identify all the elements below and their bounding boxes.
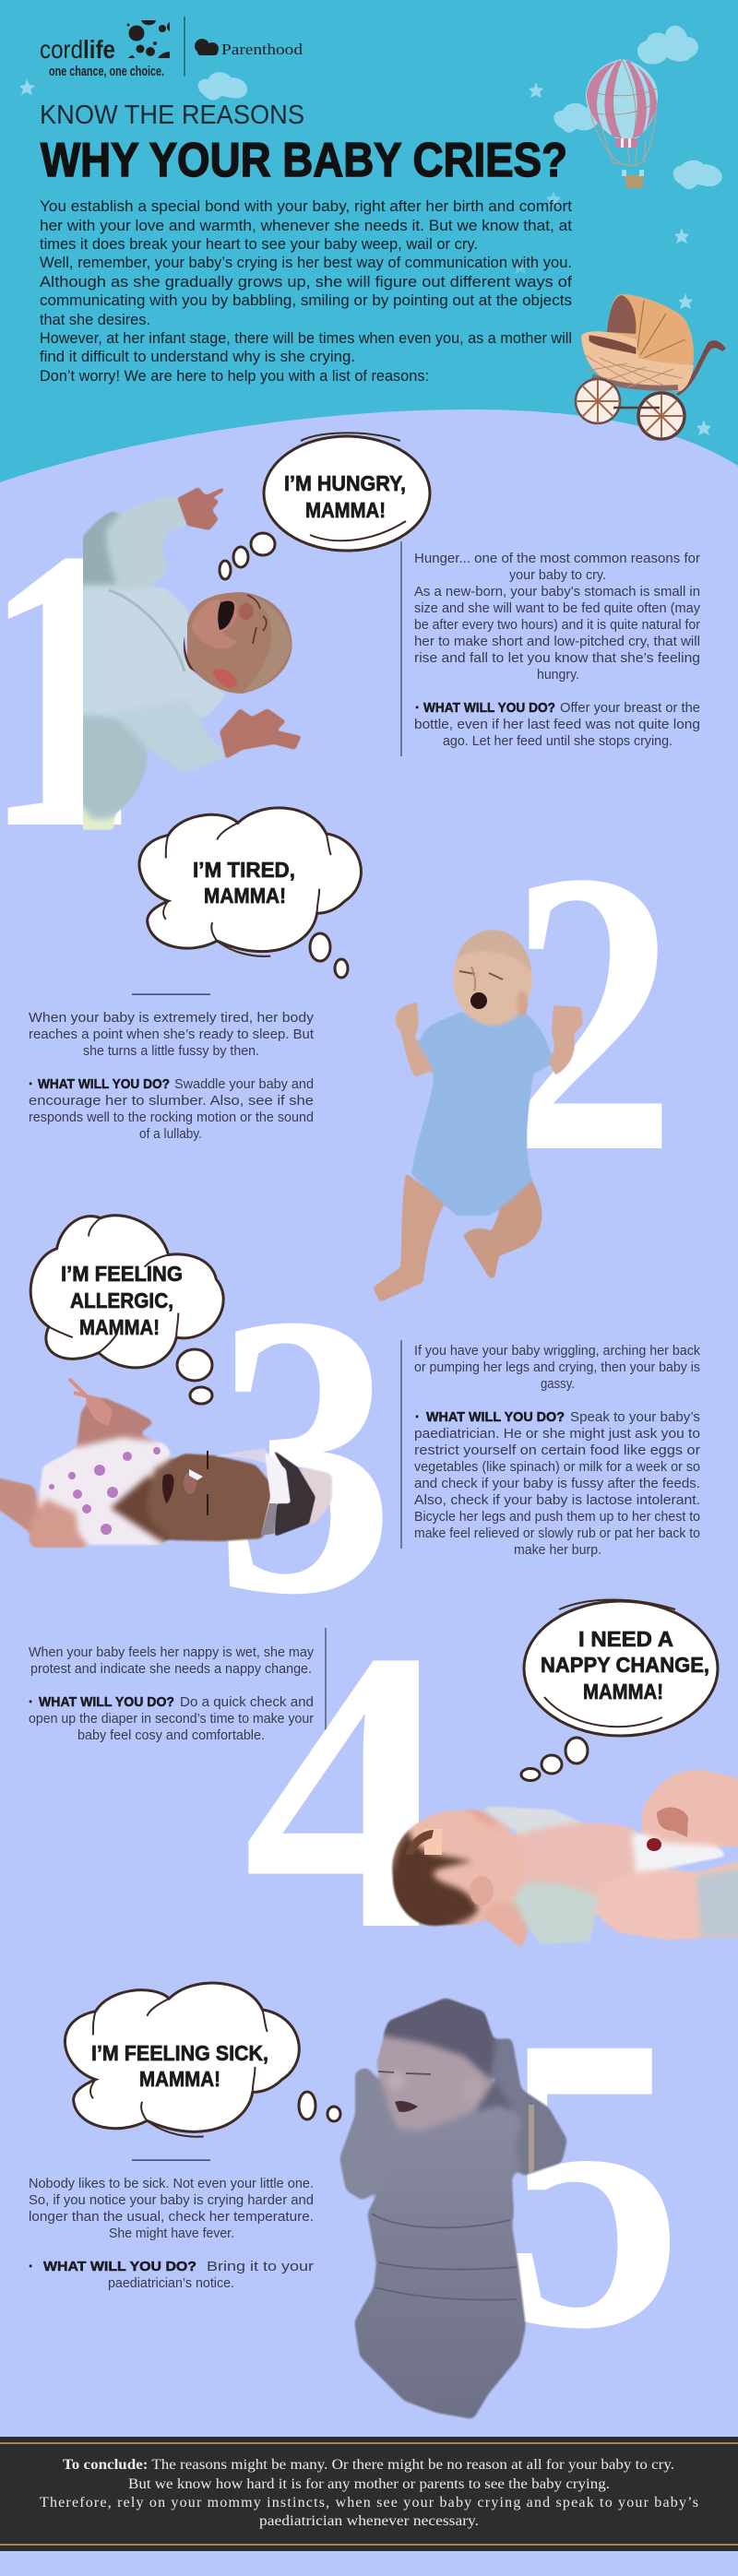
text block: reason 1: Hunger... one of the most common reasons for	[414, 552, 700, 566]
text block: reason 1: Offer your breast or the	[560, 701, 700, 716]
numeral 4: 4	[243, 1567, 455, 2013]
photo: baby 5 swaddled	[339, 1998, 567, 2419]
text block: reason 5: So, if you notice your baby is crying harder and	[29, 2193, 314, 2208]
photo: baby 3 crying with headband	[0, 1379, 332, 1548]
text block: reason 3: or pumping her legs and crying, then your baby is	[414, 1360, 700, 1375]
text block: reason 3: Also, check if your baby is lactose intolerant.	[414, 1493, 700, 1508]
text block: reason 1: rise and fall to let you know that she’s feeling	[414, 651, 700, 666]
conclusion text	[40, 2457, 698, 2529]
logo: cordlife: cordlife	[40, 35, 115, 64]
vertical divider 4	[325, 1628, 327, 1738]
bubble text: MAMMA!	[204, 884, 286, 908]
text block: reason 5: WHAT WILL YOU DO?	[43, 2259, 196, 2274]
text block: reason 5: paediatrician’s notice.	[108, 2276, 234, 2291]
text block: reason 2: reaches a point when she’s ready to sleep. But	[29, 1027, 314, 1042]
text block: reason 3: Speak to your baby’s	[570, 1410, 700, 1425]
text block: reason 4: WHAT WILL YOU DO?	[39, 1694, 174, 1710]
intro paragraph: communicating with you by babbling, smiling or by pointing out at the objects	[40, 291, 572, 309]
bubble text	[541, 1627, 709, 1703]
text block: reason 1: hungry.	[537, 668, 579, 683]
text block: reason 1: As a new-born, your baby’s stomach is small in	[414, 585, 700, 599]
text block: reason 2: When your baby is extremely tired, her body	[29, 1011, 315, 1026]
intro paragraph: You establish a special bond with your baby, right after her birth and comfort	[40, 197, 572, 215]
thought bubble: hungry	[220, 433, 430, 579]
bubble text: MAMMA!	[79, 1315, 160, 1339]
text block: reason 4: open up the diaper in second’s time to make your	[29, 1712, 314, 1727]
bubble text: I NEED A	[578, 1627, 673, 1651]
text block: reason 3: restrict yourself on certain food like eggs or	[414, 1443, 700, 1458]
thought bubble: allergic	[30, 1216, 223, 1404]
bubble text: MAMMA!	[583, 1680, 663, 1703]
bubble text	[193, 858, 295, 908]
text block: reason 2: responds well to the rocking motion or the sound	[29, 1110, 314, 1125]
icon: baby pram	[576, 294, 726, 439]
text block: reason 3: make her burp.	[514, 1543, 601, 1558]
text block: reason 1	[414, 552, 701, 749]
text block: reason 4: When your baby feels her nappy is wet, she may	[29, 1645, 315, 1660]
conclusion text: To conclude: The reasons might be many. Or there might be no reason at all for your baby to cry.	[63, 2457, 674, 2473]
text block: reason 3: WHAT WILL YOU DO?	[426, 1409, 565, 1425]
logo: Parenthood	[195, 39, 304, 58]
text block: reason 5: Bring it to your	[207, 2260, 314, 2274]
short rule	[132, 994, 210, 995]
text block: reason 3: paediatrician. He or she might just ask you to	[414, 1427, 700, 1442]
text block: reason 5	[29, 2177, 314, 2291]
logo divider	[184, 17, 185, 77]
intro paragraph: Although as she gradually grows up, she will figure out different ways of	[40, 273, 572, 291]
logo: cordlife	[40, 20, 170, 79]
thought bubble: feeling sick	[65, 1983, 340, 2137]
conclusion text: Therefore, rely on your mommy instincts, when see your baby crying and speak to your baby’s	[40, 2495, 698, 2511]
text block: reason 2: she turns a little fussy by then.	[83, 1044, 259, 1059]
text block: reason 3: make feel relieved or slowly rub or pat her back to	[414, 1526, 700, 1541]
text block: reason 3: If you have your baby wriggling, arching her back	[414, 1344, 701, 1359]
text block: reason 4	[29, 1645, 315, 1743]
conclusion text: But we know how hard it is for any mother or parents to see the baby crying.	[128, 2476, 610, 2492]
text block: reason 3: gassy.	[541, 1377, 575, 1392]
text block: reason 3	[414, 1344, 701, 1558]
text block: reason 3: vegetables (like spinach) or milk for a week or so	[414, 1460, 700, 1475]
photo: baby 1 crying on back	[76, 487, 302, 830]
bubble text: I’M FEELING SICK,	[91, 2041, 268, 2065]
header background	[0, 0, 738, 516]
text block: reason 4: baby feel cosy and comfortable.	[77, 1728, 265, 1743]
icon: hot air balloon	[586, 59, 658, 188]
bubble text: I’M TIRED,	[193, 858, 295, 882]
text block: reason 2	[29, 1011, 315, 1142]
bubble text: NAPPY CHANGE,	[541, 1653, 709, 1677]
text block: reason 2: Swaddle your baby and	[174, 1077, 314, 1092]
text block: reason 1: bottle, even if her last feed was not quite long	[414, 718, 700, 732]
intro paragraph: Don’t worry! We are here to help you with a list of reasons:	[40, 367, 429, 385]
text block: reason 2: WHAT WILL YOU DO?	[38, 1076, 170, 1092]
text block: reason 1: be after every two hours) and it is quite natural for	[414, 618, 700, 633]
logo: Parenthood: Parenthood	[221, 41, 304, 58]
heading: know the reasons: KNOW THE REASONS	[40, 101, 304, 130]
intro paragraph: her with your love and warmth, whenever she needs it. But we know that, at	[40, 217, 572, 234]
bubble text: I’M FEELING	[61, 1262, 183, 1286]
intro paragraph: However, at her infant stage, there will be times when even you, as a mother will	[40, 329, 572, 347]
numeral 3: 3	[214, 1230, 395, 1678]
bubble text	[61, 1262, 183, 1339]
thought bubble: tired	[139, 808, 361, 978]
text block: reason 1: ago. Let her feed until she stops crying.	[443, 734, 673, 749]
intro paragraph: Well, remember, your baby’s crying is her best way of communication with you.	[40, 254, 572, 271]
bubble text: MAMMA!	[305, 498, 386, 522]
text block: reason 1: ·	[415, 700, 420, 716]
bubble text	[91, 2041, 268, 2091]
photo: baby 4 nappy change	[392, 1770, 738, 1949]
thought bubble: nappy change	[521, 1599, 718, 1780]
text block: reason 2: of a lullaby.	[139, 1127, 202, 1142]
text block: reason 3: Bicycle her legs and push them up to her chest to	[414, 1510, 700, 1525]
bubble text: MAMMA!	[139, 2067, 220, 2091]
intro paragraph: find it difficult to understand why is she crying.	[40, 348, 355, 365]
text block: reason 4: protest and indicate she needs a nappy change.	[30, 1662, 312, 1677]
text block: reason 5: Nobody likes to be sick. Not even your little one.	[29, 2177, 314, 2191]
text block: reason 5: She might have fever.	[109, 2226, 234, 2241]
intro paragraph	[40, 197, 572, 385]
text block: reason 1: her to make short and low-pitched cry, that will	[414, 635, 700, 649]
numeral 2: 2	[507, 789, 676, 1237]
text block: reason 1: WHAT WILL YOU DO?	[423, 700, 555, 716]
vertical divider 3	[400, 1340, 402, 1549]
text block: reason 2: ·	[29, 1076, 33, 1092]
bubble text: ALLERGIC,	[70, 1288, 173, 1312]
decorative clouds and stars	[19, 26, 722, 435]
text block: reason 4: ·	[29, 1694, 33, 1710]
numeral 5: 5	[501, 1949, 683, 2416]
short rule 5	[132, 2160, 210, 2161]
text block: reason 1: your baby to cry.	[509, 568, 606, 583]
text block: reason 2: encourage her to slumber. Also, see if she	[29, 1094, 314, 1109]
text block: reason 1: size and she will want to be fed quite often (may	[414, 601, 701, 616]
photo: baby 2 yawning standing	[373, 930, 583, 1302]
conclusion banner	[0, 2437, 738, 2551]
intro paragraph: that she desires.	[40, 311, 150, 328]
text block: reason 5: ·	[29, 2259, 33, 2274]
text block: reason 4: Do a quick check and	[180, 1695, 314, 1710]
conclusion text: paediatrician whenever necessary.	[259, 2513, 479, 2529]
bubble text	[284, 471, 406, 522]
bubble text: I’M HUNGRY,	[284, 471, 406, 495]
text block: reason 3: and check if your baby is fussy after the feeds.	[414, 1477, 700, 1491]
heading: why your baby cries: WHY YOUR BABY CRIES?	[41, 134, 567, 187]
text block: reason 3: ·	[415, 1409, 420, 1425]
logo: cordlife: one chance, one choice.	[49, 64, 164, 79]
text block: reason 5: longer than the usual, check her temperature.	[29, 2210, 314, 2225]
vertical divider 1	[400, 541, 402, 756]
intro paragraph: times it does break your heart to see your baby weep, wail or cry.	[40, 235, 478, 253]
